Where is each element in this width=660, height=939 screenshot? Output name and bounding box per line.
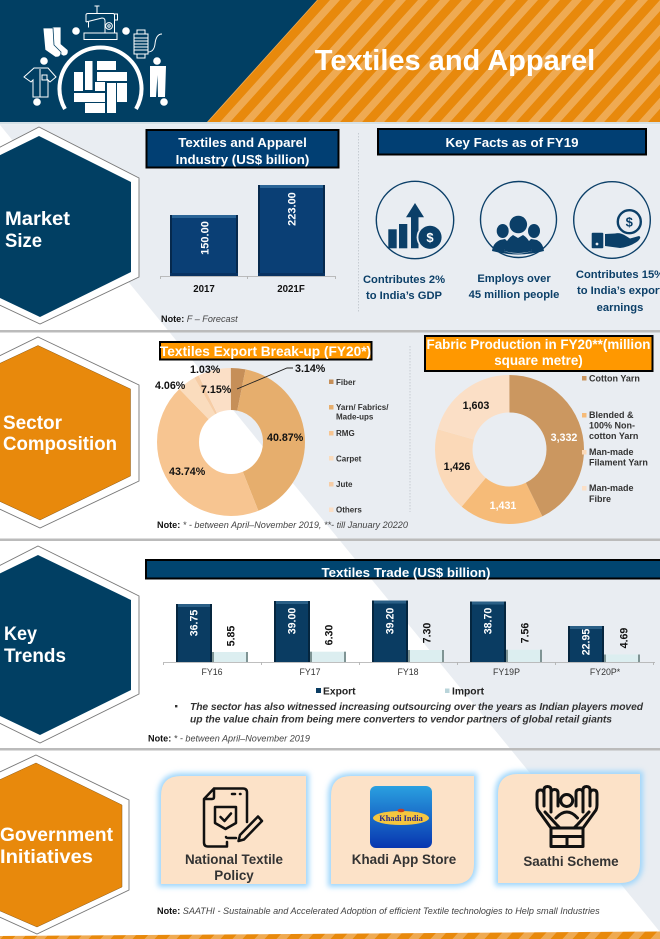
data labels: 40.87% [267, 432, 304, 444]
panel: khadi app store [331, 776, 474, 884]
label: Khadi App Store [352, 852, 456, 867]
panel: national textile policy [161, 776, 306, 884]
legend: Cotton Yarn [589, 374, 640, 384]
hexagon: sector composition [0, 337, 139, 528]
icon: people [480, 182, 556, 258]
legend: Others [336, 506, 362, 514]
data labels: 7.15% [201, 384, 232, 396]
hexagon: sector composition: Composition [3, 433, 117, 455]
text: GDP contribution: to India’s GDP [366, 290, 443, 302]
bar chart: export and import: FY20P* [590, 667, 621, 677]
bar chart: 2021F [277, 284, 305, 295]
panel: textiles trade [146, 560, 660, 744]
heading: industry size [146, 130, 338, 168]
bar chart: 150.00 [200, 221, 212, 255]
legend: Filament Yarn [589, 458, 648, 468]
legend: cotton Yarn [589, 431, 638, 441]
donut chart: fabric production [454, 394, 565, 505]
panel: industry size bar chart [146, 130, 338, 324]
legend [329, 378, 389, 514]
icon: hand with coin: $ [626, 214, 634, 230]
note: Note: * - between April–November 2019, **- till January 20220 [157, 520, 408, 530]
text: outsourcing bullet: The sector has also witnessed increasing outsourcing over the years as Indian players moved [190, 702, 644, 713]
data labels: 1,603 [463, 400, 489, 412]
hexagon: market size [0, 127, 139, 324]
data labels [444, 400, 577, 512]
data labels: 3,332 [551, 432, 577, 444]
legend [582, 374, 648, 504]
legend: Man-made [589, 483, 634, 493]
legend: Import [452, 686, 485, 698]
data labels: 43.74% [169, 466, 206, 478]
icon: policy document [204, 788, 262, 846]
bar chart: export and import: 38.70 [483, 608, 495, 634]
legend: Export [323, 686, 356, 698]
legend: Man-made [589, 447, 634, 457]
icon: trousers [150, 66, 166, 97]
icon: khadi india app [370, 786, 432, 848]
bar chart: export and import: FY18 [397, 667, 419, 677]
panel: key facts [363, 129, 660, 314]
icon: sewing machine [84, 6, 118, 40]
legend: 100% Non- [589, 420, 635, 430]
panel: textiles export break-up [155, 342, 408, 530]
bar chart: export and import: 39.20 [385, 608, 397, 634]
legend: Yarn/ Fabrics/ [336, 403, 389, 412]
bar chart: export and import: 7.56 [520, 623, 532, 643]
icon: GDP growth [376, 181, 454, 259]
text: employment [469, 273, 559, 301]
text: GDP contribution: Contributes 2% [363, 274, 445, 286]
icon: socks [43, 27, 68, 57]
data labels: 1.03% [190, 364, 221, 376]
heading: textiles trade: Textiles Trade (US$ billion) [322, 565, 490, 580]
label: Policy [214, 868, 254, 883]
data labels: 1,431 [490, 500, 516, 512]
data labels: 1,426 [444, 461, 470, 473]
heading: export break-up: Textiles Export Break-up (FY20*) [160, 344, 371, 359]
legend: Fibre [589, 494, 611, 504]
text: GDP contribution [363, 274, 445, 302]
legend: Carpet [336, 454, 362, 464]
bar chart: export and import: FY17 [299, 667, 321, 677]
bar chart: export and import: FY16 [201, 667, 223, 677]
label: Saathi Scheme [523, 854, 619, 869]
text: outsourcing bullet: up the value chain from being mere converters to vendor partners of global retail giants [190, 714, 612, 726]
bar chart [160, 185, 336, 295]
hexagon: market size: Market [5, 208, 71, 230]
panel: saathi scheme [498, 774, 640, 883]
legend: Jute [336, 480, 353, 489]
bar chart: export and import: 36.75 [189, 610, 201, 636]
donut chart: export break-up [178, 389, 284, 495]
note: Note: F – Forecast [161, 314, 238, 324]
title: Textiles and Apparel [315, 45, 595, 77]
text: employment: Employs over [477, 273, 551, 285]
data labels [155, 363, 326, 478]
logo: textile icons [24, 6, 168, 113]
note: Note: SAATHI - Sustainable and Accelerated Adoption of efficient Textile technologies to Help small Industries [157, 906, 600, 916]
note: Note: * - between April–November 2019 [148, 734, 310, 744]
hexagon: sector composition: Sector [3, 412, 62, 434]
heading: key facts [378, 129, 646, 154]
heading: fabric production: square metre) [494, 353, 583, 368]
heading: fabric production: Fabric Production in FY20**(million [427, 337, 650, 352]
icon: hands holding person [537, 786, 597, 846]
bar chart: export and import: 5.85 [226, 626, 238, 646]
heading: fabric production [425, 336, 652, 371]
data labels: 4.06% [155, 380, 186, 392]
hexagon: government initiatives [0, 755, 129, 934]
bar chart: export and import: 4.69 [619, 628, 631, 648]
bar chart: export and import: 6.30 [324, 625, 336, 645]
heading: key facts: Key Facts as of FY19 [445, 135, 579, 150]
hexagon: key trends: Key [4, 623, 37, 645]
hexagon: government initiatives: Government [0, 824, 113, 846]
bar chart: export and import: 39.00 [287, 608, 299, 634]
hexagon: government initiatives: Initiatives [0, 846, 93, 868]
legend: Fiber [336, 378, 356, 387]
bar chart: export and import: 22.95 [581, 629, 593, 655]
label [185, 852, 283, 883]
text: outsourcing bullet [175, 702, 644, 726]
legend: RMG [336, 429, 355, 438]
data labels: 3.14% [295, 363, 326, 375]
text: export earnings [576, 269, 660, 314]
bar chart: export and import: 7.30 [422, 623, 434, 643]
heading: industry size: Textiles and Apparel [178, 135, 307, 150]
text: export earnings: earnings [597, 302, 643, 314]
text: employment: 45 million people [469, 289, 559, 301]
icon: khadi india app: Khadi India [379, 814, 424, 823]
label: National Textile [185, 852, 283, 867]
hexagon: market size: Size [5, 230, 42, 252]
bar chart: 223.00 [287, 192, 299, 226]
bar chart: export and import [164, 600, 655, 677]
hexagon: key trends [0, 546, 139, 743]
icon: shirt [24, 68, 56, 97]
legend: Blended & [589, 410, 634, 420]
legend [316, 686, 485, 698]
icon: GDP growth: $ [426, 230, 434, 245]
bar chart: 2017 [193, 284, 215, 295]
heading: industry size: Industry (US$ billion) [176, 152, 309, 167]
header banner [0, 0, 660, 124]
icon: hand with coin [574, 182, 650, 258]
icon: thread spool [134, 30, 162, 58]
heading: textiles trade [146, 560, 660, 580]
panel: fabric production [425, 336, 652, 512]
bar chart: export and import: FY19P [493, 667, 520, 677]
legend: Made-ups [336, 412, 374, 422]
footer stripe [0, 932, 660, 939]
hexagon: key trends: Trends [4, 645, 66, 667]
